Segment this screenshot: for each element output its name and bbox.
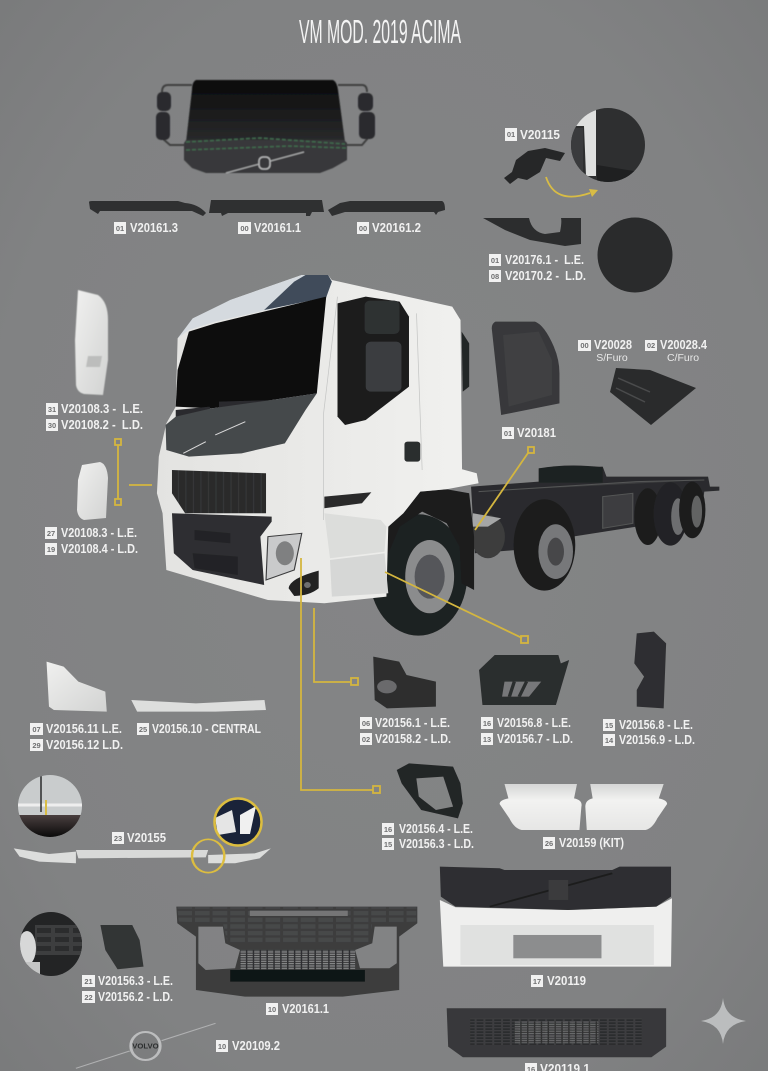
part: V20155 right strip [208, 848, 271, 863]
label: V20156.3 L.D.: 15 [384, 840, 392, 849]
label: V20108.2 L.D.: V20108.2 - L.D. [61, 418, 143, 432]
frame highlight [479, 480, 704, 528]
label: V20156.8 L.E.: V20156.8 - L.E. [497, 716, 571, 730]
label: V20156.10 CENTRAL: V20156.10 - CENTRAL [152, 722, 261, 736]
fog lamp [289, 571, 319, 596]
part: V20161.1 bumper grille [176, 907, 417, 997]
part: V20176 round cap [598, 218, 672, 292]
part: V20156.11 white corner [47, 662, 107, 712]
truck chassis [471, 467, 719, 553]
label: V20156.9 L.D. bracket: 14 [605, 736, 614, 745]
front wheel [369, 514, 467, 636]
label: V20156.4 L.E.: V20156.4 - L.E. [399, 822, 473, 836]
label: V20176.2 L.D.: V20170.2 - L.D. [505, 269, 586, 283]
label: V20028 S/Furo: V20028 [594, 338, 632, 352]
label: V20156.1 L.E.: V20156.1 - L.E. [375, 716, 450, 730]
hood emblem line [183, 422, 245, 453]
label: V20176.1 L.E.: 01 [491, 256, 499, 265]
label: V20158.2 L.D.: 02 [362, 735, 370, 744]
label: V20155: V20155 [127, 831, 166, 845]
label: V20161.3: 01 [116, 224, 124, 233]
part: V20156.8 bracket [634, 632, 666, 708]
cab body [157, 275, 479, 603]
lower parts group [14, 632, 672, 1068]
lower grille slot [193, 530, 238, 575]
step panel [330, 553, 388, 597]
part: V20158 dark corner [373, 657, 436, 708]
middle wheel [514, 499, 575, 591]
part: V20119.1 lower grille [447, 1008, 666, 1057]
text: VM MOD. 2019 ACIMA [299, 13, 461, 50]
label: V20156.7 L.D.: V20156.7 - L.D. [497, 732, 573, 746]
label: V20108.2 L.D.: 30 [48, 421, 56, 430]
part: V20156.3 dark panel [100, 925, 144, 969]
label: V20156.3 L.E. lower: V20156.3 - L.E. [98, 974, 173, 988]
windscreen [176, 297, 326, 408]
part: V20176 cover [483, 218, 581, 246]
fuel tank [539, 466, 603, 483]
headlight [266, 533, 302, 580]
label: V20161.3 [114, 221, 178, 235]
label: V20181: V20181 [517, 426, 556, 440]
detail circle: V20155 end with yellow ring [214, 798, 262, 846]
label: V20159 KIT: 26 [545, 839, 553, 848]
label: V20181 [502, 426, 556, 440]
detail circle: V20115 [571, 108, 646, 182]
label: V20028.4 C/Furo [645, 338, 707, 364]
side stripe [324, 492, 371, 508]
label: V20109.2 [216, 1039, 280, 1053]
label: V20156.8 L.E. bracket: V20156.8 - L.E. [619, 718, 693, 732]
callout: left bracket connector [115, 439, 152, 505]
wheel arch [388, 489, 474, 590]
part: V20156.10 white strip [131, 700, 266, 712]
side window [338, 297, 409, 425]
part: right upper strip [328, 201, 445, 216]
label: V20028.4 C/Furo: V20028.4 [660, 338, 707, 352]
part: cab windscreen assembly with mirrors [156, 80, 375, 173]
part: V20159 kit right [585, 784, 667, 830]
part: V20115 clip [504, 148, 565, 184]
label: V20108.4 L.D. lower: 19 [47, 545, 55, 554]
part: V20181 door panel [492, 322, 559, 415]
connector: V20181 [475, 447, 534, 530]
part: V20119 grille panel [440, 867, 672, 967]
label: V20156.10 CENTRAL: 25 [139, 725, 147, 734]
label: V20161.1 lower [266, 1002, 329, 1016]
part: V20028 cover [610, 368, 696, 425]
detail circle: headlight and grille [18, 912, 82, 976]
callout ring: V20155 [192, 839, 224, 873]
label: V20159 KIT: V20159 (KIT) [559, 836, 624, 850]
label: V20156.11 L.E.: V20156.11 L.E. [46, 722, 122, 736]
label: V20156.8 L.E.: 16 [483, 719, 491, 728]
label: V20108.3 L.E. lower: V20108.3 - L.E. [61, 526, 137, 540]
label: V20161.2: 00 [359, 224, 367, 233]
label: V20156.7 L.D.: 13 [483, 735, 491, 744]
label: V20156.4 L.E.: 16 [384, 825, 392, 834]
label: V20108.3 L.E.: 31 [48, 405, 56, 414]
label: V20156.1 L.E.: 06 [362, 719, 370, 728]
label: V20119 [531, 974, 586, 988]
label: V20181: 01 [504, 429, 512, 438]
label: V20161.1 lower: 10 [268, 1005, 276, 1014]
lower grille [172, 513, 272, 585]
connector: step [385, 572, 528, 643]
label: V20108.3 L.E.: V20108.3 - L.E. [61, 402, 143, 416]
arrow: V20115 to detail [546, 177, 598, 197]
label: V20156.9 L.D. bracket: V20156.9 - L.D. [619, 733, 695, 747]
label: V20176.2 L.D.: 08 [491, 272, 499, 281]
wipers [176, 400, 275, 417]
label: V20109.2: 10 [218, 1042, 226, 1051]
label: V20156.11 L.E.: 07 [32, 725, 41, 734]
hood panel [166, 393, 317, 457]
label: V20161.1 [238, 221, 301, 235]
lower mirror [366, 342, 401, 392]
part: V20155 center strip [76, 850, 208, 858]
label: V20115: V20115 [520, 128, 560, 142]
label: V20109.2: V20109.2 [232, 1039, 280, 1053]
part: left upper strip [89, 201, 206, 216]
fender shade [324, 513, 386, 558]
label: V20119: 17 [533, 977, 541, 986]
upper grille [172, 470, 266, 513]
detail circle: windshield corner [18, 775, 82, 837]
differential [471, 513, 505, 558]
icon: Volvo badge [76, 1023, 216, 1068]
label: V20156.3 L.D.: V20156.3 - L.D. [399, 837, 474, 851]
label: V20161.2: V20161.2 [372, 221, 421, 235]
label: V20156.12 L.D.: V20156.12 L.D. [46, 738, 123, 752]
label: V20028 S/Furo [578, 338, 632, 364]
label: V20156.3 L.E. lower: 21 [84, 977, 93, 986]
label: V20028.4 C/Furo: 02 [647, 341, 655, 350]
part: center upper strip [209, 200, 324, 216]
label: V20115: 01 [507, 130, 515, 139]
roof cap [178, 275, 332, 338]
label: V20028.4 C/Furo: C/Furo [667, 352, 699, 364]
part: V20159 kit left [500, 784, 582, 830]
label: V20156.2 L.D. lower: 22 [84, 993, 93, 1002]
label: V20158.2 L.D.: V20158.2 - L.D. [375, 732, 451, 746]
truck illustration [157, 275, 719, 636]
label: V20108.4 L.D. lower: V20108.4 - L.D. [61, 542, 138, 556]
label: V20161.1: V20161.1 [254, 221, 301, 235]
part: V20108 upper white panel [75, 290, 108, 395]
label: V20155: 23 [114, 834, 122, 843]
rear wheels [634, 482, 705, 546]
label: V20161.3: V20161.3 [130, 221, 178, 235]
part: V20108 lower white panel [77, 462, 108, 520]
upper mirror [365, 301, 400, 334]
label: V20161.1: 00 [240, 224, 249, 233]
label: V20156.12 L.D.: 29 [32, 741, 41, 750]
connector: V20158 [314, 608, 358, 685]
label: V20115 [505, 128, 560, 142]
part: V20156.8 step [479, 655, 569, 705]
rear edge trim [462, 332, 469, 392]
label: V20119: V20119 [547, 974, 586, 988]
connector: V20156.4 [301, 558, 380, 793]
label: V20156.8 L.E. bracket: 15 [605, 721, 613, 730]
label: V20156.2 L.D. lower: V20156.2 - L.D. [98, 990, 173, 1004]
label: V20028 S/Furo: 00 [580, 341, 589, 350]
label: V20108.3 L.E. lower: 27 [47, 529, 55, 538]
door line [324, 297, 422, 520]
part: V20155 left strip [14, 848, 76, 863]
label: V20176.1 L.E.: V20176.1 - L.E. [505, 253, 584, 267]
icon: Volvo badge: VOLVO [132, 1042, 159, 1050]
door handle [404, 442, 420, 462]
label: V20028 S/Furo: S/Furo [596, 352, 628, 364]
label: V20161.1 lower: V20161.1 [282, 1002, 329, 1016]
icon: sparkle star [701, 998, 746, 1044]
part: V20156.4 frame [397, 763, 463, 818]
label: V20155 [112, 831, 166, 845]
